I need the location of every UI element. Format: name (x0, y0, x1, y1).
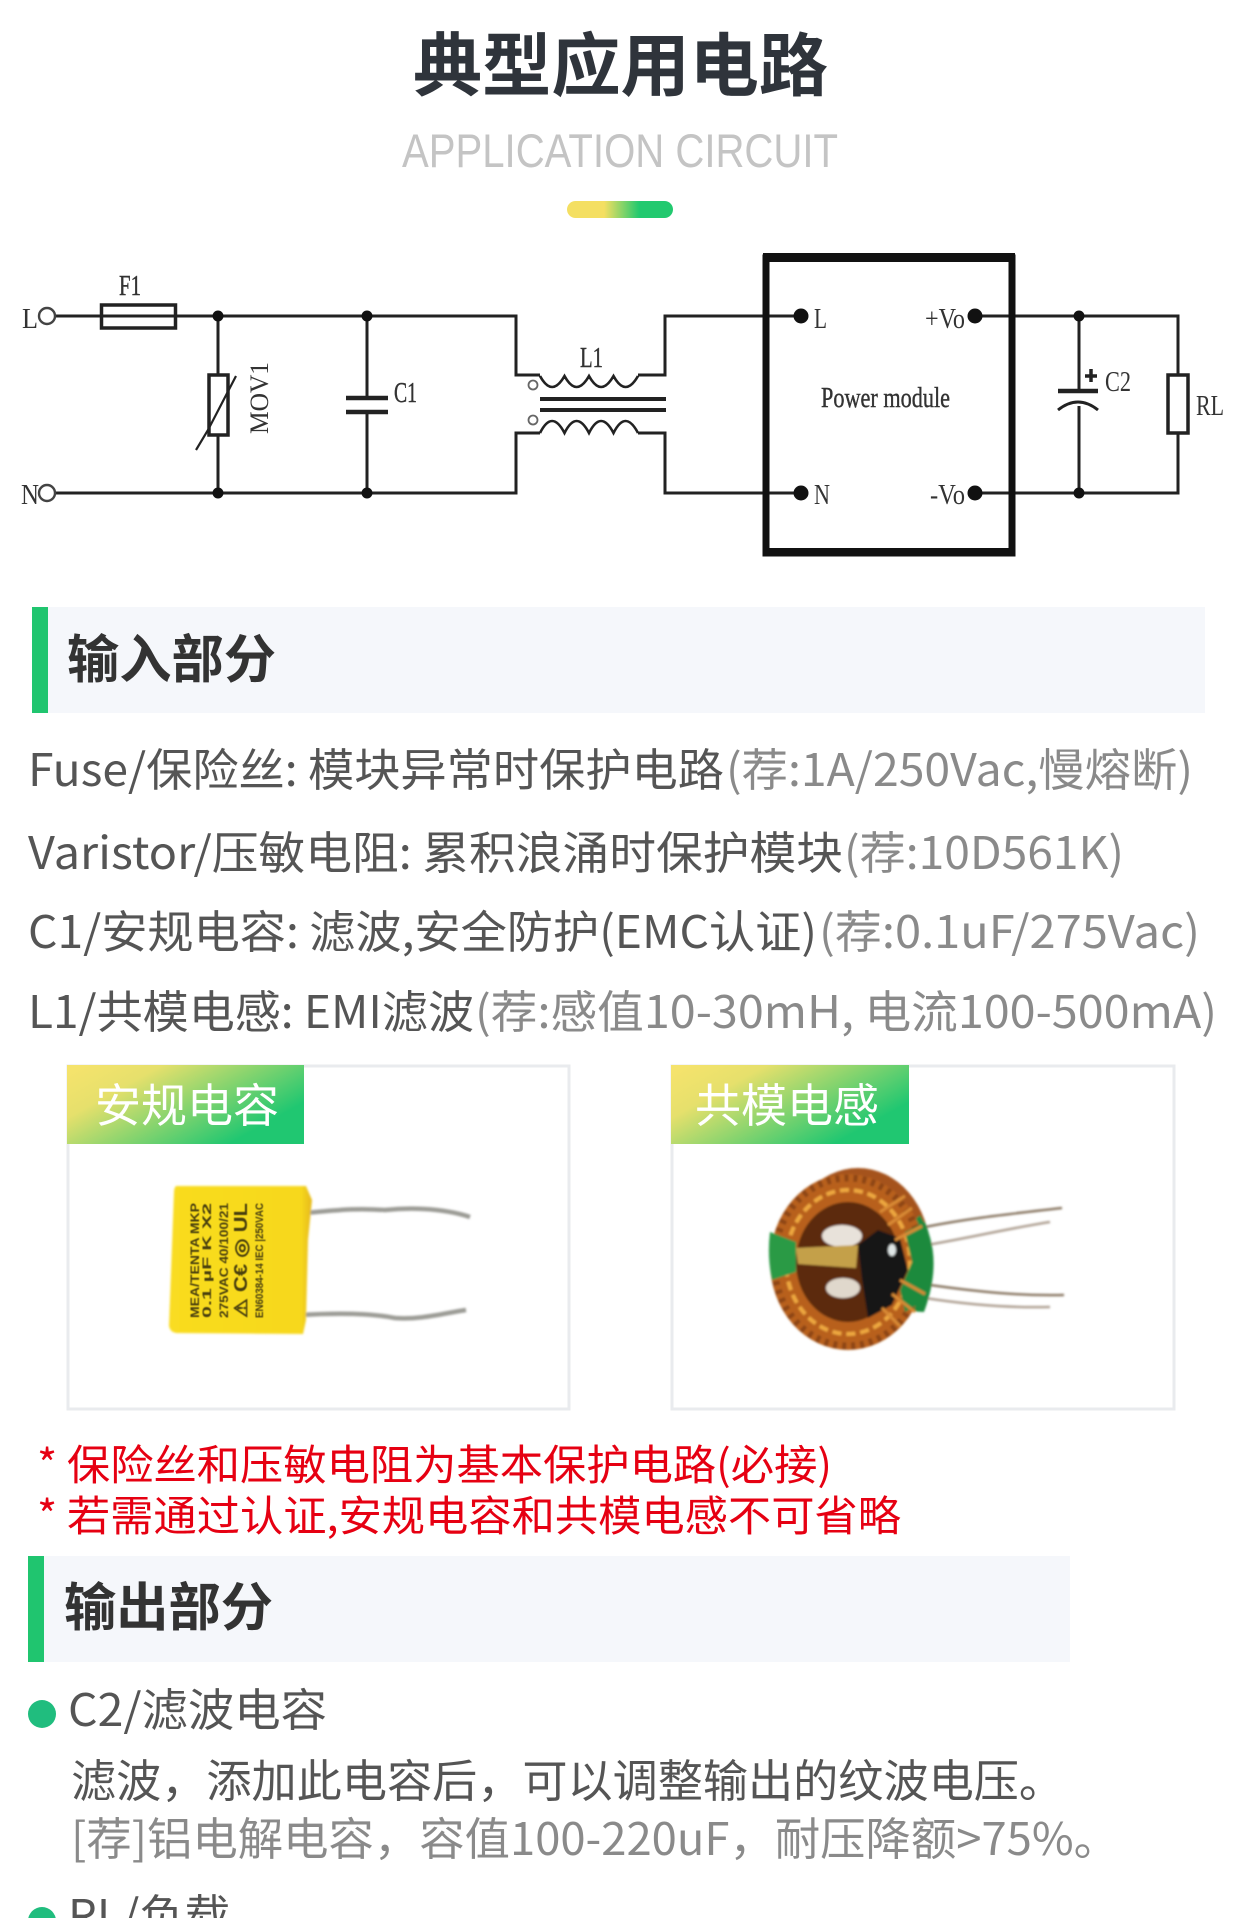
capacitor C2 (1058, 367, 1131, 410)
section header: output: 输出部分 (64, 1566, 273, 1641)
pin terminals: +Vo (925, 304, 965, 335)
photo: yellow X2 capacitor: 275VAC 40/100/21 (217, 1203, 231, 1318)
varistor MOV1 (196, 362, 274, 450)
line: C1: C1/安规电容: 滤波,安全防护(EMC认证) (28, 896, 817, 961)
power module box: Power module (821, 383, 950, 414)
line: varistor: Varistor/压敏电阻: 累积浪涌时保护模块 (28, 817, 843, 882)
load resistor RL: RL (1196, 391, 1224, 422)
panel: common mode inductor (671, 1065, 1174, 1409)
input terminals: N (21, 480, 39, 511)
photo: yellow X2 capacitor (169, 1186, 470, 1334)
line: L1: L1/共模电感: EMI滤波 (28, 976, 474, 1041)
capacitor C1 (346, 378, 417, 412)
pin terminals (794, 304, 982, 511)
pin terminals: L (814, 304, 827, 335)
bullet: RL (28, 1907, 56, 1918)
tag: safety capacitor: 安规电容 (95, 1070, 279, 1136)
power module box (763, 253, 1015, 556)
line: varistor: (荐:10D561K) (844, 817, 1124, 882)
panel: safety capacitor (67, 1065, 569, 1409)
input parts list (28, 734, 1217, 1041)
line: L1: (荐:感值10-30mH, 电流100-500mA) (475, 976, 1217, 1041)
tag: common mode inductor: 共模电感 (695, 1070, 879, 1136)
photo: toroid inductor (769, 1168, 1064, 1350)
photo: yellow X2 capacitor: 0.1 µF K X2 (200, 1202, 214, 1318)
fuse F1 (101, 271, 176, 328)
title accent pill (567, 201, 673, 218)
line: fuse: (荐:1A/250Vac,慢熔断) (726, 734, 1193, 799)
note: required protection: * 保险丝和压敏电阻为基本保护电路(必接) (37, 1432, 832, 1493)
title: 典型应用电路 (413, 10, 828, 110)
input wiring (55, 316, 1178, 493)
C2 heading: C2/滤波电容 (68, 1674, 327, 1739)
C2 recommendation: [荐]铝电解电容，容值100-220uF，耐压降额>75%。 (71, 1803, 1119, 1868)
pin terminals: -Vo (930, 480, 965, 511)
photo: yellow X2 capacitor: EN60384-14 IEC |250VAC (254, 1203, 266, 1318)
section header: input (32, 607, 1205, 713)
tag: common mode inductor (671, 1065, 909, 1144)
input terminals: L (22, 304, 38, 335)
photo: yellow X2 capacitor: MEA/TENTA MKP (188, 1203, 202, 1318)
note: certification: * 若需通过认证,安规电容和共模电感不可省略 (37, 1483, 901, 1544)
capacitor C2: C2 (1105, 367, 1131, 398)
fuse F1: F1 (119, 271, 141, 302)
capacitor C1: C1 (394, 378, 417, 409)
line: C1 (28, 896, 1200, 961)
junction dots (212, 310, 1084, 498)
C2 description: 滤波，添加此电容后，可以调整输出的纹波电压。 (71, 1745, 1064, 1810)
line: L1 (28, 976, 1217, 1041)
line: C1: (荐:0.1uF/275Vac) (819, 896, 1200, 961)
photo: yellow X2 capacitor: ⚠ C€ ◎ UL (231, 1203, 251, 1318)
varistor MOV1: MOV1 (245, 362, 274, 434)
pin terminals: N (814, 480, 830, 511)
line: fuse (28, 734, 1193, 799)
common mode inductor L1: L1 (580, 343, 603, 374)
subtitle: APPLICATION CIRCUIT (402, 124, 838, 177)
section header: output (28, 1556, 1070, 1662)
common mode inductor L1 (528, 343, 666, 433)
line: fuse: Fuse/保险丝: 模块异常时保护电路 (28, 734, 724, 799)
load resistor RL (1168, 375, 1224, 433)
section header: input: 输入部分 (67, 618, 276, 693)
bullet: C2 (28, 1700, 56, 1728)
tag: safety capacitor (67, 1065, 304, 1144)
circuit diagram (21, 253, 1224, 556)
input terminals (21, 304, 55, 511)
